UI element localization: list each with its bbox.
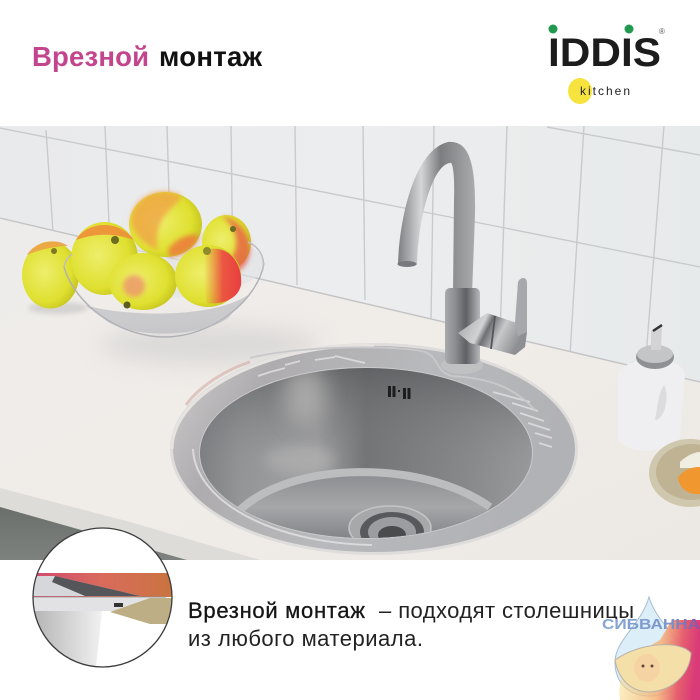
logo: IDDIS kitchen: IDDIS [548, 31, 661, 75]
description text: – подходят столешницы [379, 598, 634, 623]
photo: kitchen sink [0, 126, 700, 560]
logo: IDDIS kitchen: kitchen [580, 84, 630, 98]
logo: IDDIS kitchen: ® [659, 27, 665, 36]
title [32, 41, 262, 72]
description text [188, 598, 634, 651]
counter front edge [0, 488, 260, 560]
icon: plate with fruit [649, 439, 700, 507]
bottom inset: mounting detail [33, 528, 173, 667]
icon: soap dispenser [618, 324, 685, 451]
description text: из любого материала. [188, 626, 423, 651]
sink [170, 343, 578, 555]
title: Врезной [32, 41, 149, 72]
faucet [398, 142, 527, 374]
title: монтаж [159, 41, 262, 72]
logo: IDDIS kitchen [548, 24, 665, 104]
icon: apples in glass bowl [22, 191, 264, 337]
countertop [52, 231, 679, 560]
description text: Врезной монтаж [188, 598, 365, 623]
watermark: СибВанна [602, 597, 700, 700]
watermark: СибВанна: СИБВАННА [602, 617, 700, 633]
